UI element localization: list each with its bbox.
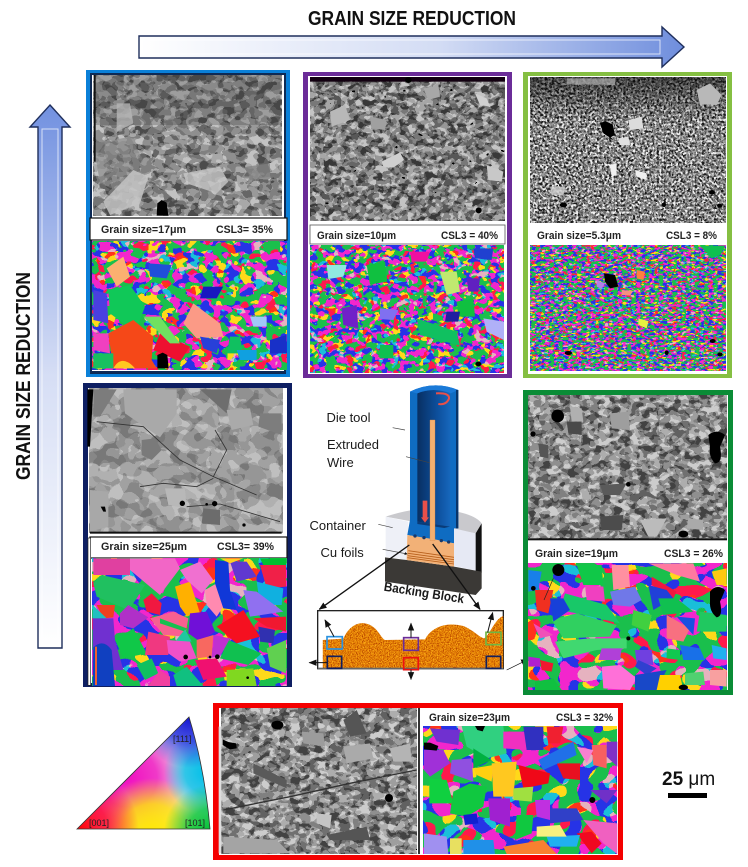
arrow: horizontal grain size reduction (139, 27, 684, 67)
extruded wire (430, 420, 435, 541)
pointer lines (378, 428, 429, 554)
arrows to cross-section (319, 544, 480, 609)
label bar: grain size and CSL3: CSL3 = 40% (441, 230, 498, 242)
sample location markers (327, 632, 501, 670)
label bar: grain size and CSL3: Grain size=19μm (535, 548, 618, 560)
copper chamber and foils (407, 534, 454, 567)
orientation map: 19 micron (528, 563, 727, 690)
label bar: grain size and CSL3: CSL3= 35% (216, 224, 273, 236)
icon: red pressing arrow (421, 501, 429, 523)
label: Cu foils: Cu foils (320, 545, 364, 560)
panel: 5.3 micron sample, light green frame (523, 72, 732, 378)
cross-section box (309, 611, 528, 679)
micrograph: grey 25 micron (87, 388, 283, 534)
panel: 23 micron sample, red frame (213, 703, 623, 860)
micrograph: grey 10 micron (310, 77, 505, 221)
label: Backing Block: Backing Block (383, 579, 466, 606)
icon: red rotation arrow (436, 393, 449, 404)
title: horizontal: GRAIN SIZE REDUCTION (308, 8, 516, 30)
label: Die tool: Die tool (326, 410, 371, 425)
orientation map: 25 micron (88, 538, 287, 686)
label bar: grain size and CSL3: CSL3 = 8% (666, 230, 717, 242)
orientation map: 10 micron (310, 245, 504, 373)
scale bar: 25 micron: 25 μm (662, 769, 715, 790)
label bar: grain size and CSL3 (90, 218, 287, 240)
panel: central extrusion schematic (309, 385, 528, 679)
container (386, 508, 482, 573)
label bar: grain size and CSL3 (310, 225, 505, 244)
label bar: grain size and CSL3: Grain size=17μm (101, 224, 186, 236)
label bar: grain size and CSL3 (423, 708, 618, 726)
label bar: grain size and CSL3 (528, 543, 727, 563)
micrograph: grey 17 micron (93, 75, 282, 216)
label: Extruded Wire (327, 437, 379, 470)
orientation map: 17 micron (92, 241, 287, 370)
label bar: grain size and CSL3: Grain size=25μm (101, 541, 187, 553)
label bar: grain size and CSL3: Grain size=10μm (317, 230, 396, 242)
label bar: grain size and CSL3: Grain size=23μm (429, 712, 510, 724)
label bar: grain size and CSL3 (90, 537, 287, 558)
label: Extruded Wire: Wire (327, 455, 354, 470)
label: Extruded Wire: Extruded (327, 437, 379, 452)
label: [101]: [101] (185, 818, 205, 828)
backing block (385, 557, 482, 595)
panel: 10 micron sample, purple frame (303, 72, 512, 378)
panel: 25 micron sample, navy frame (83, 383, 292, 687)
label: [001]: [001] (89, 818, 109, 828)
title: vertical: GRAIN SIZE REDUCTION (13, 272, 35, 480)
label: Container: Container (309, 518, 366, 533)
orientation map: 5.3 micron (530, 245, 726, 371)
label: [111]: [111] (173, 734, 192, 744)
label bar: grain size and CSL3: CSL3 = 26% (664, 548, 723, 560)
panel: 19 micron sample, green frame (523, 390, 733, 695)
label bar: grain size and CSL3 (530, 225, 726, 245)
panel: 17 micron sample, blue frame (86, 70, 290, 377)
micrograph: grey 19 micron (528, 395, 727, 540)
die tool (407, 385, 458, 543)
micrograph: grey 5.3 micron (530, 77, 726, 223)
label bar: grain size and CSL3: Grain size=5.3μm (537, 230, 621, 242)
label bar: grain size and CSL3: CSL3= 39% (217, 541, 274, 553)
micrograph: grey 23 micron (220, 708, 417, 854)
label bar: grain size and CSL3: CSL3 = 32% (556, 712, 613, 724)
sample location arrows (309, 613, 528, 679)
arrow: vertical grain size reduction (30, 105, 70, 648)
legend: inverse pole figure triangle (76, 716, 210, 830)
orientation map: 23 micron (423, 725, 617, 854)
